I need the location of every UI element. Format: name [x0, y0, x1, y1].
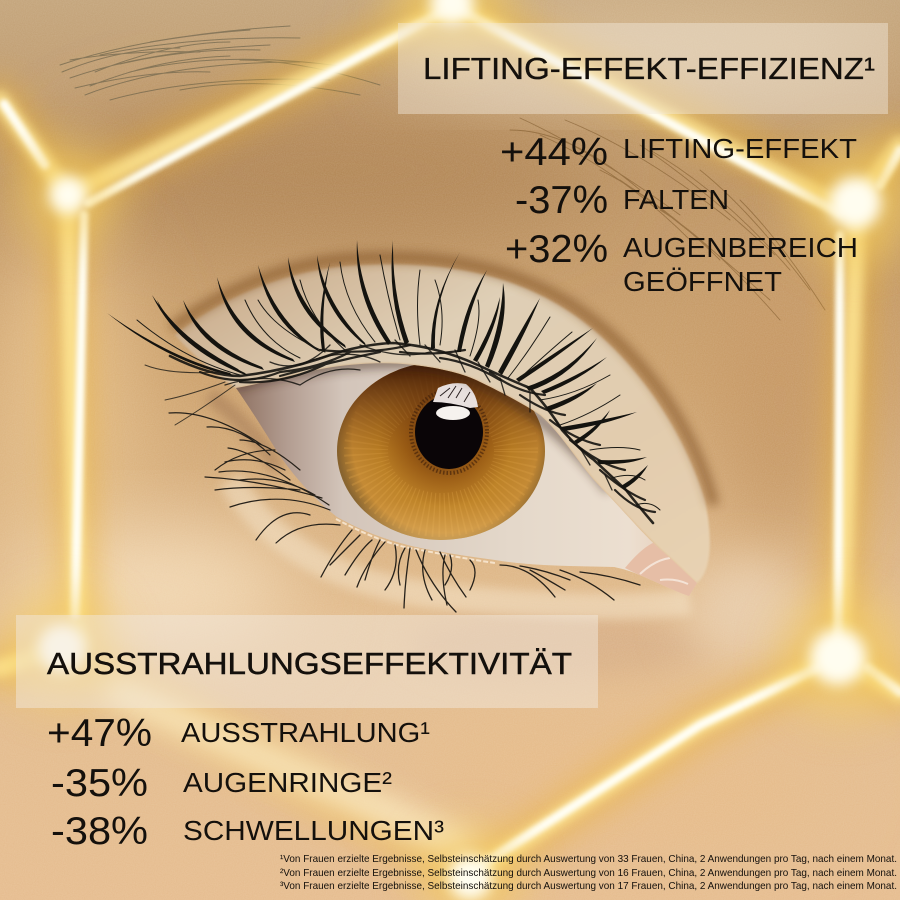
- eyeball: [236, 363, 697, 596]
- panel: lifting effect: [398, 23, 888, 297]
- iris: [337, 362, 545, 540]
- eyebrow hairs: [60, 26, 380, 100]
- panel: radiance: [16, 615, 598, 853]
- thin lashes: [137, 255, 660, 510]
- eyelid crease shadow: [172, 257, 714, 505]
- inner corner: [625, 543, 696, 596]
- heading: AUSSTRAHLUNGSEFFEKTIVITÄT: [47, 646, 572, 681]
- long tapered lashes: [107, 240, 648, 489]
- iris fibers: [366, 387, 516, 515]
- heading: LIFTING-EFFEKT-EFFIZIENZ¹: [423, 51, 875, 86]
- upper lashes: [107, 240, 660, 523]
- stat: +44% lifting effect: [500, 131, 857, 174]
- stat: +32% eye area opened: AUGENBEREICH: [623, 232, 858, 263]
- stat: +47% radiance: [47, 712, 430, 755]
- stat: +44% lifting effect: LIFTING-EFFEKT: [623, 133, 857, 164]
- stat: -38% puffiness: [51, 810, 444, 853]
- panel background: [398, 23, 888, 114]
- shadow around eye corner: [210, 395, 278, 470]
- lower lid highlight: [230, 480, 690, 606]
- stat: +32% eye area opened: +32%: [505, 228, 608, 271]
- upper eyelid: [175, 264, 710, 583]
- stat: -35% dark circles: -35%: [51, 762, 148, 805]
- panel background: [16, 615, 598, 708]
- lid shadow on eye: [236, 362, 610, 490]
- stat: -38% puffiness: SCHWELLUNGEN³: [183, 815, 444, 846]
- stat: +47% radiance: AUSSTRAHLUNG¹: [181, 717, 430, 748]
- lower lashes: [169, 413, 640, 612]
- stat: +32% eye area opened: GEÖFFNET: [623, 266, 782, 297]
- stat: -35% dark circles: AUGENRINGE²: [183, 767, 392, 798]
- stat: +32% eye area opened: [505, 228, 858, 297]
- lower lid margin sparkle: [336, 519, 495, 563]
- pupil: [415, 395, 483, 469]
- footnotes: [280, 853, 897, 892]
- skin fold hairs: [510, 118, 825, 320]
- stat: +44% lifting effect: +44%: [500, 131, 608, 174]
- illustration: eye: [107, 240, 714, 612]
- stat: -37% wrinkles: -37%: [515, 179, 608, 222]
- sclera: [236, 363, 670, 588]
- stat: +47% radiance: +47%: [47, 712, 152, 755]
- eye reflection: [433, 383, 478, 408]
- stat: -35% dark circles: [51, 762, 392, 805]
- lash tangle band: [170, 340, 655, 523]
- stat: -38% puffiness: -38%: [51, 810, 148, 853]
- stat: -37% wrinkles: FALTEN: [623, 184, 729, 215]
- stat: -37% wrinkles: [515, 179, 729, 222]
